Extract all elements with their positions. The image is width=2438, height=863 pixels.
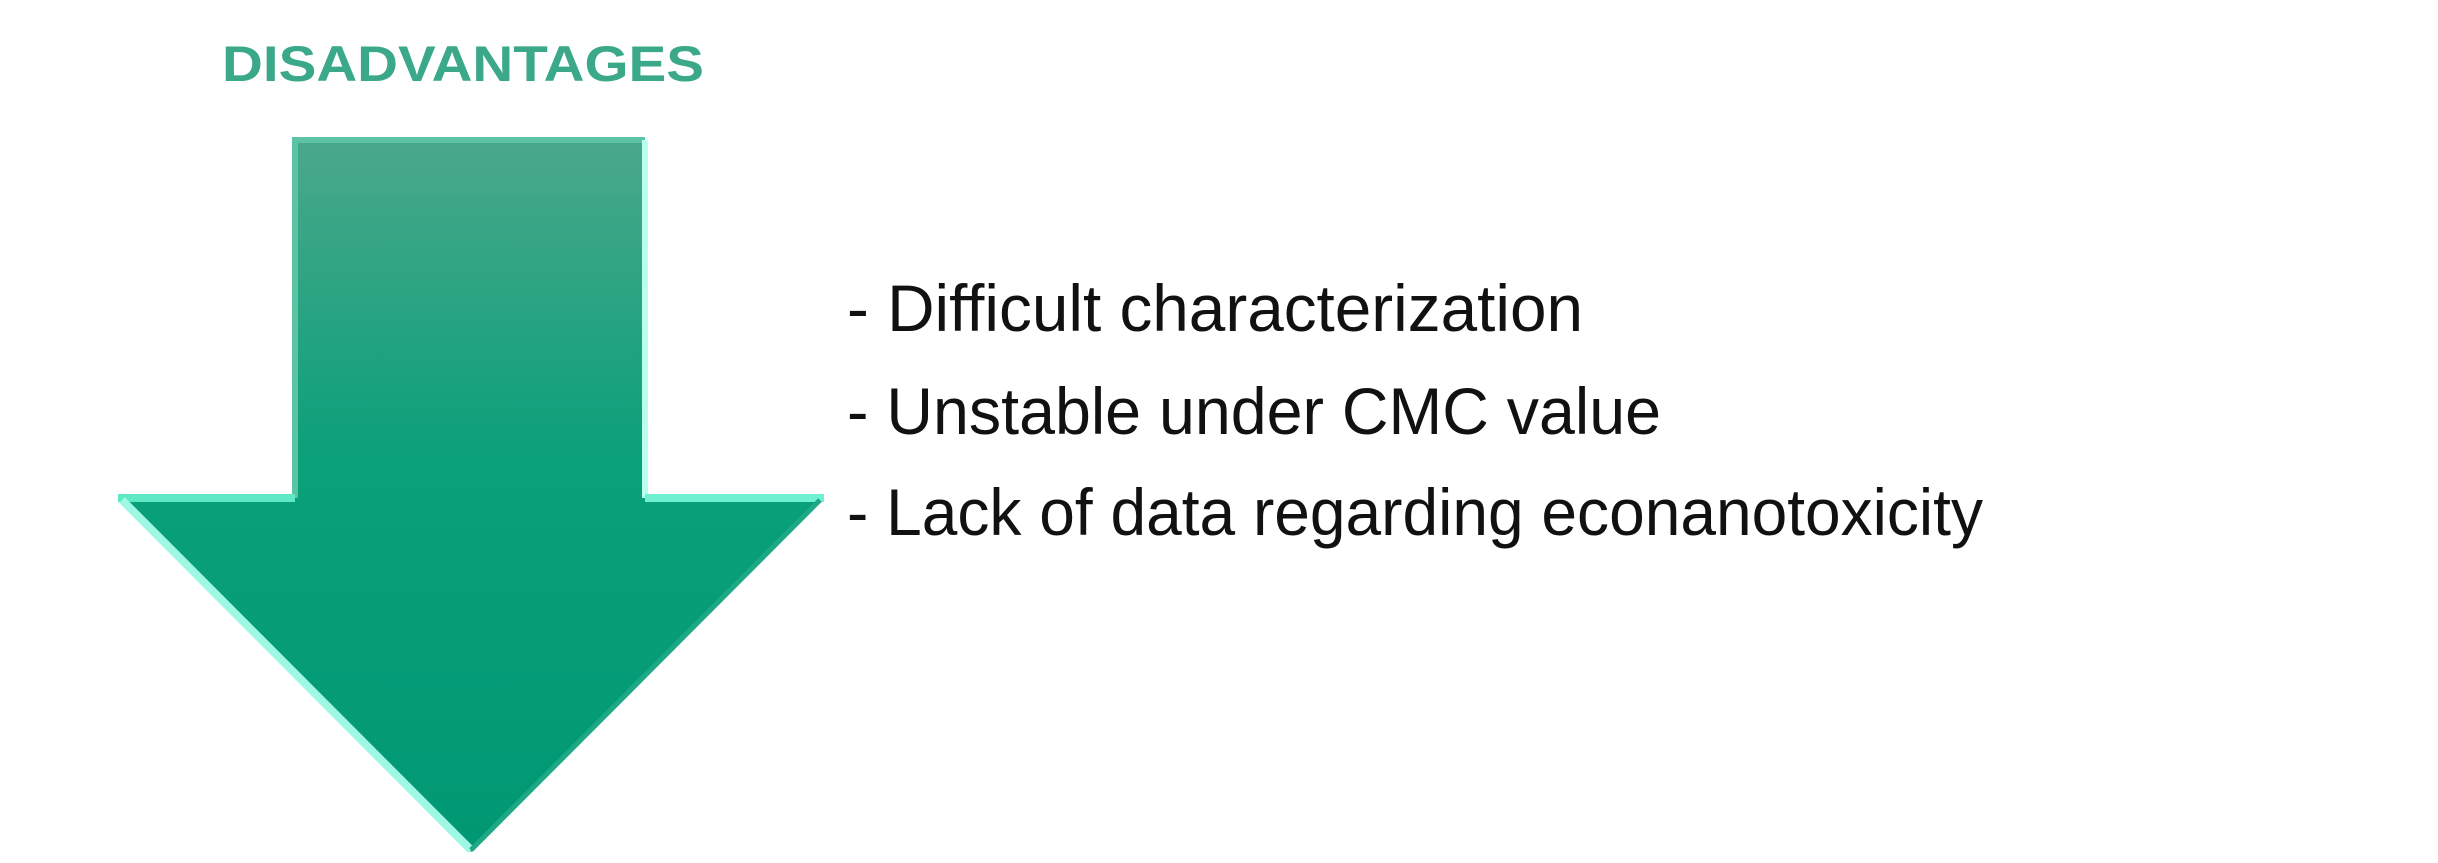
text block: disadvantages list: - Lack of data regarding econanotoxicity (847, 475, 1983, 549)
icon: down arrow (118, 140, 824, 852)
title: DISADVANTAGES (222, 36, 704, 92)
text block: disadvantages list: - Difficult characterization (847, 271, 1583, 345)
text block: disadvantages list (847, 271, 1983, 549)
text block: disadvantages list: - Unstable under CMC value (847, 374, 1661, 448)
